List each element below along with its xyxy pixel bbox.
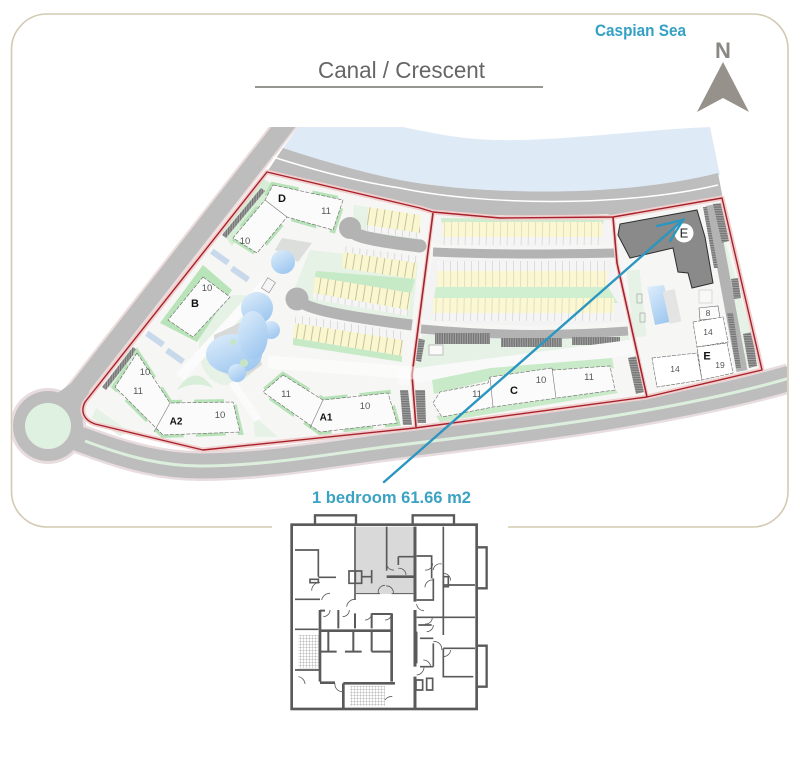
icon: north arrow — [697, 38, 749, 112]
building D: 10 — [240, 236, 250, 247]
site ground — [83, 172, 762, 450]
building B: 10 — [202, 283, 212, 294]
site map — [10, 112, 790, 466]
building A2 — [115, 353, 240, 435]
building A1: 10 — [360, 401, 370, 412]
building A2: 10 — [140, 367, 150, 378]
building E south: 8 — [706, 308, 711, 318]
label: Caspian Sea: Caspian Sea — [595, 22, 687, 40]
stair hatching — [298, 635, 385, 706]
building E south: E — [703, 350, 711, 362]
parking bays — [102, 188, 757, 425]
townhouses west — [293, 207, 420, 362]
page frame — [12, 14, 788, 527]
rock gardens — [214, 323, 262, 377]
building E south: 19 — [715, 360, 725, 370]
building D: D — [278, 193, 286, 205]
building A1 — [263, 375, 397, 432]
building E south — [652, 290, 733, 387]
building B — [160, 265, 232, 342]
building C: 10 — [536, 375, 546, 386]
lagoon — [206, 250, 295, 382]
building D: 11 — [321, 206, 331, 217]
visitor parking strips — [145, 249, 250, 364]
building A1: A1 — [320, 412, 333, 424]
arrow: unit location — [384, 220, 683, 482]
building E selected — [618, 210, 713, 288]
building E south: 14 — [670, 364, 680, 374]
marker: E — [674, 224, 694, 242]
highlighted unit — [356, 527, 415, 594]
building A2: 10 — [215, 410, 225, 421]
walls — [292, 515, 487, 709]
label: unit size: 1 bedroom 61.66 m2 — [312, 488, 471, 507]
walkway and courtyard — [145, 238, 633, 420]
building A2: 11 — [133, 386, 143, 397]
internal roads — [286, 205, 742, 371]
building B: B — [191, 298, 199, 310]
building C: 11 — [472, 389, 482, 400]
building C: C — [510, 385, 518, 397]
townhouses central — [433, 214, 618, 321]
building A2: A2 — [170, 416, 183, 428]
building C: 11 — [584, 372, 594, 383]
icon: north arrow: N — [715, 38, 731, 63]
floor plan — [292, 515, 487, 709]
title: Canal / Crescent — [318, 57, 486, 83]
building E south: 14 — [703, 327, 713, 337]
site boundary — [83, 172, 762, 450]
doors — [298, 563, 451, 700]
building A1: 11 — [281, 389, 291, 400]
watermark haze — [410, 366, 416, 380]
water: canal — [283, 127, 720, 192]
building C — [432, 358, 618, 422]
marker: E: E — [680, 226, 689, 240]
roads — [10, 112, 790, 466]
lawns — [92, 178, 760, 437]
plot E amenity — [637, 285, 681, 325]
building D — [233, 185, 343, 253]
